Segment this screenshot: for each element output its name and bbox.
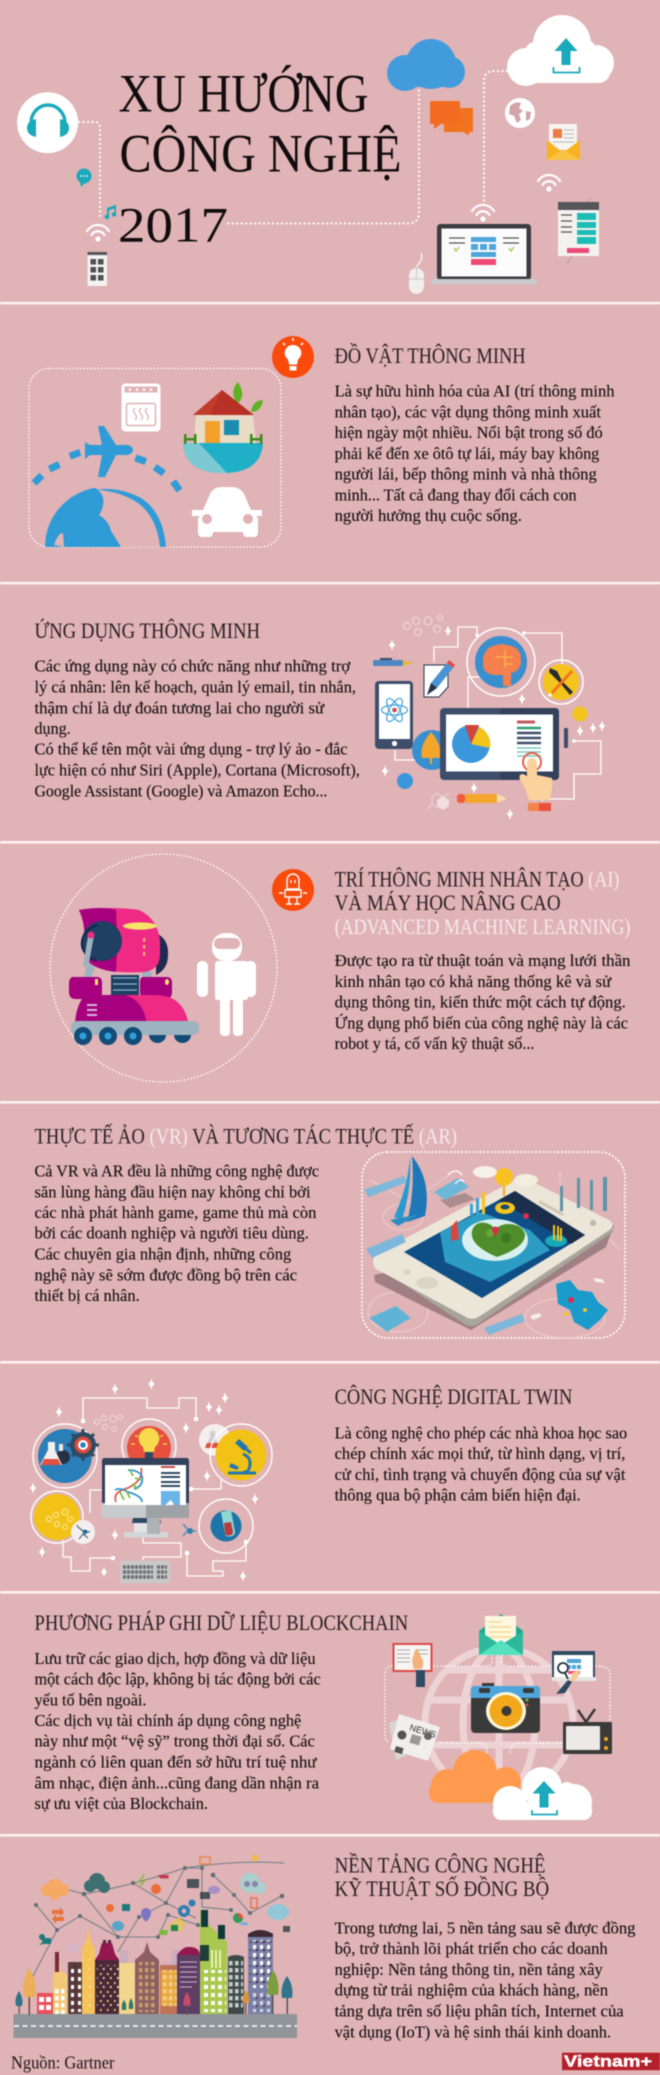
panel: smart apps — [34, 616, 606, 820]
floating icons — [39, 1855, 290, 1953]
text block: một cách độc lập, không bị tác động bởi các — [34, 1670, 321, 1689]
text block: dụng. — [34, 719, 71, 738]
text block: Cả VR và AR đều là những công nghệ được — [34, 1162, 319, 1181]
heading: CÔNG NGHỆ DIGITAL TWIN — [335, 1383, 572, 1409]
icon: car — [192, 487, 262, 537]
icon: pink robot — [69, 908, 199, 1045]
icon: brain circle — [467, 628, 535, 696]
icon: light bulb badge — [272, 336, 314, 378]
text block: Là sự hữu hình hóa của AI (trí thông minh — [335, 382, 615, 401]
title: XU HƯỚNG — [118, 64, 368, 124]
panel: digital platforms — [14, 1852, 636, 2041]
heading — [335, 866, 630, 939]
white upload cloud — [493, 1767, 592, 1820]
text block: dựng từ trải nghiệm của khách hàng, nền — [335, 1981, 609, 2000]
icon: headphones — [17, 92, 78, 153]
icon: blue cloud — [387, 39, 465, 91]
icon: globe — [505, 98, 535, 128]
heading: VÀ MÁY HỌC NÂNG CAO — [335, 890, 561, 915]
newspaper: NEWS — [408, 1722, 437, 1740]
heading: TRÍ THÔNG MINH NHÂN TẠO (AI) — [335, 866, 620, 892]
icon: wifi right — [538, 175, 560, 192]
camera — [471, 1683, 540, 1733]
icon: pen — [373, 658, 414, 666]
text block: săn lùng hàng đầu hiện nay không chỉ bởi — [34, 1182, 311, 1201]
illustration: apps — [373, 616, 606, 820]
icon: house — [183, 382, 263, 473]
circle: test tube — [199, 1499, 253, 1553]
text block: ngành có liên quan đến sở hữu trí tuệ như — [34, 1752, 318, 1771]
text block — [34, 1162, 319, 1305]
icon: wifi left — [87, 225, 109, 242]
icon: wifi laptop — [472, 205, 494, 222]
text block: người lái, bếp thông minh và nhà thông — [335, 465, 597, 484]
illustration: media globe — [385, 1614, 612, 1820]
text block: lý cá nhân: lên kế hoạch, quản lý email, tin nhắn, — [34, 677, 356, 696]
monitor — [102, 1458, 189, 1538]
text block: Các chuyên gia nhận định, những công — [34, 1244, 291, 1263]
heading: NỀN TẢNG CÔNG NGHỆ — [335, 1852, 546, 1878]
globe — [425, 1648, 573, 1796]
world map — [556, 1280, 608, 1330]
network lines — [32, 1862, 284, 1978]
circle: small molecule — [71, 1520, 95, 1544]
header panel — [17, 15, 614, 294]
source note: Nguồn: Gartner — [11, 2052, 115, 2072]
illustration: science network — [29, 1378, 272, 1583]
text block: nghệ này sẽ sớm được đồng bộ trên các — [34, 1265, 297, 1284]
heading: THỰC TẾ ẢO (VR) VÀ TƯƠNG TÁC THỰC TẾ (AR) — [34, 1122, 457, 1148]
shadow — [374, 1225, 614, 1330]
heading: ĐỒ VẬT THÔNG MINH — [335, 342, 526, 368]
panel: AI — [50, 854, 631, 1082]
text block: người hưởng thụ cuộc sống. — [335, 506, 522, 525]
icon: pencil — [457, 794, 507, 803]
text block: này như một “vệ sỹ” trong thời đại số. Các — [34, 1732, 315, 1751]
text block: các nhà phát hành game, game thủ mà còn — [34, 1203, 317, 1222]
icon: robot badge — [272, 869, 314, 911]
wave tile — [434, 1178, 469, 1200]
logo: Vietnam+: Vietnam+ — [564, 2053, 652, 2070]
text block: thậm chí là dự đoán tương lai cho người sử — [34, 698, 325, 717]
text block: bởi các doanh nghiệp và người tiêu dùng. — [34, 1224, 309, 1243]
icon: note with pencil — [424, 660, 455, 697]
icon: gear — [67, 1429, 99, 1461]
illustration: smart objects — [28, 367, 282, 548]
text block: robot y tá, cố vấn kỹ thuật số... — [335, 1034, 534, 1053]
tv — [563, 1709, 612, 1754]
text block: nghiệp: Nền tảng thông tin, nền tảng xây — [335, 1960, 603, 1979]
phone screen — [404, 1191, 585, 1298]
icon: tablet ui — [558, 198, 599, 264]
keyboard — [120, 1561, 170, 1583]
panel: digital twin — [29, 1378, 627, 1583]
panel: smart objects — [28, 335, 615, 548]
text block: chép chính xác mọi thứ, từ hình dạng, vị trí, — [335, 1444, 625, 1463]
icon: leaf circle — [412, 730, 452, 770]
circle: idea bulb — [122, 1419, 176, 1473]
trees — [15, 1968, 292, 2015]
icon: small phone — [88, 252, 107, 286]
title: 2017 — [118, 197, 228, 253]
tablet dashboard — [440, 708, 559, 780]
panel: VR AR — [34, 1122, 625, 1338]
text block: tảng dựa trên số liệu phân tích, Internet của — [335, 2002, 624, 2021]
bars — [560, 1177, 607, 1211]
phone body — [373, 1178, 613, 1326]
sun and clouds — [473, 1166, 538, 1196]
text block: phải kể đến xe ôtô tự lái, máy bay không — [335, 444, 599, 463]
logo: Vietnam+ — [562, 2053, 660, 2070]
dividers — [0, 302, 660, 1837]
text block — [34, 1649, 321, 1813]
road — [14, 2014, 297, 2038]
text block: Có thể kể tên một vài ứng dụng - trợ lý ảo - đắc — [34, 740, 348, 759]
text block: vật dụng (IoT) và hệ sinh thái kinh doanh. — [335, 2022, 611, 2041]
text block: yếu tố bên ngoài. — [34, 1690, 146, 1709]
book with hand — [392, 1643, 432, 1687]
text block — [335, 951, 631, 1053]
connector dots — [79, 71, 507, 224]
text block: hiện ngày một nhiều. Nổi bật trong số đó — [335, 423, 603, 442]
circle: flask — [33, 1424, 97, 1488]
text block: bộ, trở thành lõi phát triển cho các doanh — [335, 1939, 608, 1958]
text block: Lưu trữ các giao dịch, hợp đồng và dữ liệu — [34, 1649, 316, 1668]
heading — [335, 1852, 549, 1901]
ghost decor — [368, 1170, 620, 1338]
illustration: robots — [50, 854, 277, 1082]
text block: lực hiện có như Siri (Apple), Cortana (Microsoft), — [34, 761, 360, 780]
circle: microscope — [210, 1424, 272, 1486]
laptop with magnifier — [552, 1651, 596, 1694]
icon: white upload cloud — [507, 15, 614, 86]
text block: sự ưu việt của Blockchain. — [34, 1794, 208, 1813]
text block: Ứng dụng phổ biến của công nghệ này là các — [335, 1013, 628, 1032]
text block: Được tạo ra từ thuật toán và mạng lưới thần — [335, 951, 631, 970]
icon: globe — [44, 487, 170, 548]
icon: laptop — [431, 224, 537, 284]
illustration: smart city — [14, 1855, 297, 2038]
connector dots — [385, 1655, 610, 1752]
icon: molecule — [404, 616, 442, 636]
icon: mail envelope — [547, 124, 580, 160]
icon: oven — [122, 384, 160, 432]
pie chart — [452, 725, 490, 763]
text block: kinh nhân tạo có khả năng thống kê và sử — [335, 972, 612, 991]
dna — [115, 1468, 142, 1502]
text block — [335, 1918, 636, 2041]
sailboat — [390, 1156, 427, 1226]
text block: Các dịch vụ tài chính áp dụng công nghệ — [34, 1711, 301, 1730]
blue tiles — [364, 1176, 525, 1335]
text block: thông qua bộ phận cảm biến hiện đại. — [335, 1486, 581, 1505]
icon: tools circle — [539, 660, 583, 704]
title — [118, 64, 402, 253]
text block: Là công nghệ cho phép các nhà khoa học sao — [335, 1423, 627, 1442]
text block: minh... Tất cả đang thay đổi cách con — [335, 485, 577, 504]
panel: blockchain — [34, 1609, 612, 1820]
buildings — [37, 1910, 273, 2014]
text block: âm nhạc, điện ảnh...cũng đang dần nhận ra — [34, 1773, 320, 1792]
text block: thiết bị cá nhân. — [34, 1286, 140, 1305]
icon: music note — [105, 205, 116, 219]
icon: smartphone — [375, 681, 413, 749]
title: CÔNG NGHỆ — [120, 124, 402, 184]
text block: cử chỉ, tình trạng và chuyển động của sự vật — [335, 1465, 626, 1484]
circle: small flask — [199, 1424, 231, 1456]
envelope — [479, 1614, 523, 1655]
text block: dụng thông tin, kiến thức một cách tự động. — [335, 993, 626, 1012]
newspaper — [389, 1714, 440, 1761]
text block: Trong tương lai, 5 nền tảng sau sẽ được đồng — [335, 1918, 636, 1937]
icon: hand tapping — [519, 753, 552, 811]
orange cloud — [429, 1750, 521, 1803]
text block — [34, 657, 360, 800]
icon: mouse — [409, 253, 424, 294]
icon: white humanoid — [197, 933, 256, 1036]
molecule — [94, 1414, 123, 1431]
illustration: AR smartphone — [362, 1152, 625, 1338]
text block: Google Assistant (Google) và Amazon Echo... — [34, 781, 327, 800]
heading: ỨNG DỤNG THÔNG MINH — [34, 617, 260, 643]
heading: PHƯƠNG PHÁP GHI DỮ LIỆU BLOCKCHAIN — [34, 1609, 408, 1635]
icon: orange chat — [430, 101, 473, 136]
circle: molecule — [31, 1491, 83, 1543]
text block — [335, 382, 615, 525]
icon: airplane — [32, 426, 182, 492]
text block: nhân tạo), các vật dụng thông minh xuất — [335, 402, 601, 421]
heading: KỸ THUẬT SỐ ĐỒNG BỘ — [335, 1875, 549, 1901]
text block — [335, 1423, 627, 1505]
icon: chat bubble — [76, 168, 92, 187]
text block: Các ứng dụng này có chức năng như những trợ — [34, 657, 350, 676]
